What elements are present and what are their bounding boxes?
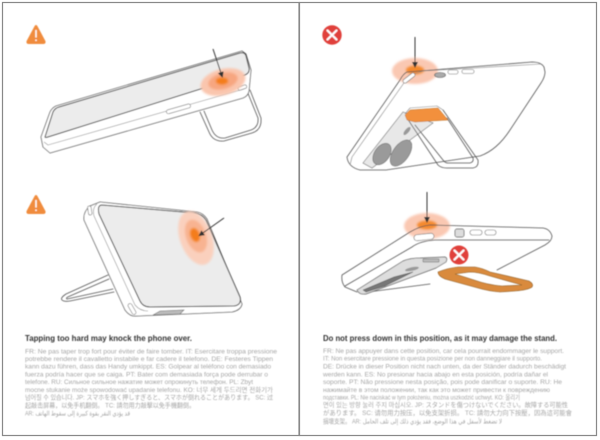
phone edge details <box>44 89 244 145</box>
side buttons <box>402 70 474 84</box>
arrow <box>200 218 224 235</box>
orange collapsed stand <box>438 267 533 292</box>
translations: werden kann. ES: No presionar hacia abajo en esta posición, podría dañar el <box>322 372 548 378</box>
translations: mocne stukanie może spowodować upadanie telefonu. KO: 너무 세게 두드리면 전화기가 <box>25 385 273 394</box>
phone body <box>347 62 545 170</box>
illustration: phone on side with stand, tapped at top <box>27 26 261 153</box>
translations: soporte. PT: Não pressione nesta posição, pois pode danificar o suporte. RU: Не <box>323 379 562 386</box>
translations: FR: Ne pas taper trop fort pour éviter de faire tomber. IT: Esercitare troppa pressione <box>25 348 277 356</box>
illustration: phone pressed flat with orange stand collapsing <box>342 192 552 294</box>
stand loop <box>200 90 261 141</box>
camera plate <box>363 112 433 168</box>
phone edge details <box>93 204 148 311</box>
icon: error cross <box>322 25 342 45</box>
translations: подставки. PL: Nie naciskać w tym położeniu, można uszkodzić uchwyt. KO: 올리기 <box>323 392 520 402</box>
translations: fuerza podría hacer que se caiga. PT: Bater com demasiada força pode derrubar o <box>25 372 268 378</box>
pressure hotspot <box>404 213 450 239</box>
translations: AR: قد يؤدي النقر بقوة كبيرة إلى سقوط الهاتف <box>25 410 130 418</box>
phone body <box>342 225 552 292</box>
pressure hotspot <box>197 63 249 101</box>
translations: kann dazu führen, dass das Handy umkippt. ES: Golpear al teléfono con demasiado <box>25 364 271 370</box>
text block: left heading and translations <box>25 333 277 418</box>
phone body <box>84 202 242 316</box>
translations <box>25 348 277 418</box>
side buttons <box>414 229 496 241</box>
heading: Tapping too hard may knock the phone over. <box>25 333 192 343</box>
translations: potrebbe rendere il cavalletto instabile e far cadere il telefono. DE: Festeres Tippen <box>25 356 273 363</box>
heading: Do not press down in this position, as it may damage the stand. <box>323 333 557 343</box>
text block: right heading and translations <box>322 333 573 426</box>
translations: DE: Drücke in dieser Position nicht nach unten, da der Ständer dadurch beschädigt <box>323 364 566 370</box>
phone screen <box>98 205 240 307</box>
arrow <box>213 49 222 76</box>
translations: FR: Ne pas appuyer dans cette position, car cela pourrait endommager le support. <box>323 348 564 355</box>
arrow <box>426 192 428 221</box>
translations: IT: Non esercitare pressione in questa posizione per non danneggiare il supporto. <box>323 356 542 362</box>
stand loop <box>62 275 114 301</box>
panel: right frame <box>300 2 596 436</box>
translations: があります。 SC: 请勿用力按压，以免支架折损。 TC: 請勿大力向下按壓，因為這可能會 <box>323 408 573 417</box>
camera plate <box>357 257 447 294</box>
translations: 損壞支架。 AR: لا تضغط لأسفل في هذا الوضع، فقد يؤدي ذلك إلى تلف الحامل <box>323 416 502 426</box>
translations: 넘어질 수 있습니다. JP: スマホを強く押しすぎると、スマホが倒れることがあります。 SC: 过 <box>25 392 274 402</box>
orange stand <box>405 106 478 168</box>
panel: left frame <box>2 2 299 436</box>
illustration: back of phone on orange stand, pressed from top <box>322 25 545 170</box>
icon: warning triangle <box>27 196 45 213</box>
pressure hotspot <box>392 58 438 84</box>
icon: warning triangle <box>27 26 45 43</box>
translations: нажимайте в этом положении, так как это может привести к повреждению <box>323 386 550 394</box>
illustration: phone standing in landscape, tapped at corner <box>27 196 242 316</box>
translations: 면이 있는 방향 눌러 주지 마십시오. JP: スタンドを傷つけないでください。故障する可能性 <box>323 400 569 409</box>
translations: telefone. RU: Сильное сильное нажатие может опрокинуть телефон. PL: Zbyt <box>25 379 253 386</box>
translations <box>322 348 573 426</box>
phone body <box>41 51 251 153</box>
icon: error cross <box>450 246 468 264</box>
phone screen <box>45 53 249 137</box>
pressure hotspot <box>171 206 221 270</box>
arrow <box>414 37 416 66</box>
translations: 起敲击屏幕，以免手机翻倒。 TC: 請勿用力敲擊以免手機翻倒。 <box>25 400 195 410</box>
